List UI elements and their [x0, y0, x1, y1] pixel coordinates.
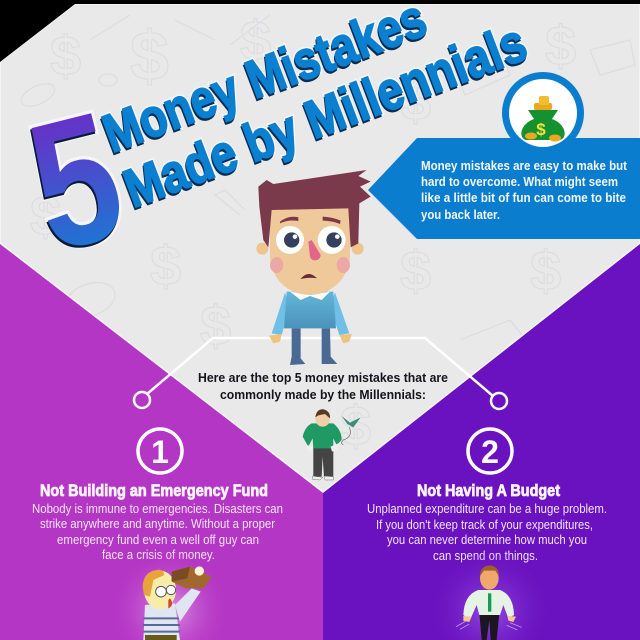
background money doodles: $: [30, 184, 61, 247]
nose: [308, 240, 321, 260]
item 1: body text: strike anywhere and anytime. Without a proper: [40, 517, 275, 531]
item 2: body text: you can never determine how much you: [387, 533, 587, 547]
eyebrows: [280, 217, 341, 224]
mouth: [302, 275, 315, 278]
background money doodles: $: [200, 294, 231, 357]
big numeral 5: 5: [12, 74, 141, 290]
legs: [290, 328, 337, 365]
background money doodles: $: [400, 69, 431, 132]
character: man with empty pockets: [303, 409, 361, 480]
panel: grey header background: [0, 4, 640, 492]
flying money: [342, 416, 361, 427]
background money doodles: $: [480, 174, 511, 237]
item 1: body text: face a crisis of money.: [102, 548, 215, 562]
item 1: body text: Nobody is immune to emergencies. Disasters can: [32, 502, 283, 516]
black top-left corner: [0, 0, 640, 62]
character: man with empty pockets, tie: [456, 565, 522, 640]
panel: right purple background: [323, 240, 640, 640]
intro text: you back later.: [421, 208, 500, 222]
panel: left magenta background: [0, 240, 323, 640]
item 2: body text: [367, 502, 607, 563]
hair: [258, 170, 371, 247]
item 1: body text: [32, 502, 283, 562]
title: [10, 0, 535, 292]
callout: intro box: [368, 72, 640, 239]
background money doodles: $: [50, 24, 81, 87]
big numeral 5: 5: [11, 76, 140, 292]
intro text: Money mistakes are easy to make but: [421, 159, 628, 173]
item 2: number badge: [468, 429, 512, 473]
background money doodles: $: [240, 9, 271, 72]
face: [270, 207, 350, 295]
eyes: [276, 226, 304, 254]
icon: money bag: $: [536, 120, 546, 139]
intro statement: commonly made by the Millennials:: [220, 387, 426, 402]
item 1: body text: emergency fund even a well off guy can: [57, 533, 259, 547]
intro statement: Here are the top 5 money mistakes that are: [198, 370, 448, 385]
connector lines: [134, 338, 507, 409]
item 1: number badge: [138, 429, 182, 473]
background money doodles: $: [130, 17, 169, 95]
icon: money bag: [509, 79, 577, 147]
intro statement: [198, 370, 448, 402]
glow left: [108, 548, 232, 640]
character: man looking into empty wallet: [143, 566, 212, 640]
glow right: [428, 548, 552, 640]
background money doodles: $: [545, 14, 576, 77]
sweater: [284, 292, 336, 328]
item 2: number badge: 2: [481, 434, 499, 470]
hands: [269, 334, 352, 343]
big numeral 5: 5: [12, 74, 141, 290]
collar: [290, 292, 330, 300]
cheeks: [270, 257, 283, 273]
background money doodles: $: [400, 239, 431, 302]
intro text: [421, 159, 628, 222]
intro text: like a little bit of fun can come to bite: [421, 191, 626, 205]
item 2: body text: Unplanned expenditure can be a huge problem.: [367, 502, 607, 516]
background money doodles: [18, 9, 635, 457]
item 2: body text: can spend on things.: [433, 549, 538, 563]
item 1: number badge: 1: [151, 434, 169, 470]
item 1: heading: Not Building an Emergency Fund: [40, 481, 268, 500]
intro text: hard to overcome. What might seem: [421, 175, 618, 189]
item 2: body text: If you don't keep track of your expenditures,: [376, 518, 593, 532]
background money doodles: $: [530, 239, 561, 302]
background money doodles: $: [340, 394, 371, 457]
arms: [272, 293, 349, 335]
ears: [256, 243, 268, 255]
item 2: heading: Not Having A Budget: [417, 481, 560, 500]
character: worried young man: [256, 170, 371, 365]
background money doodles: $: [150, 234, 181, 297]
